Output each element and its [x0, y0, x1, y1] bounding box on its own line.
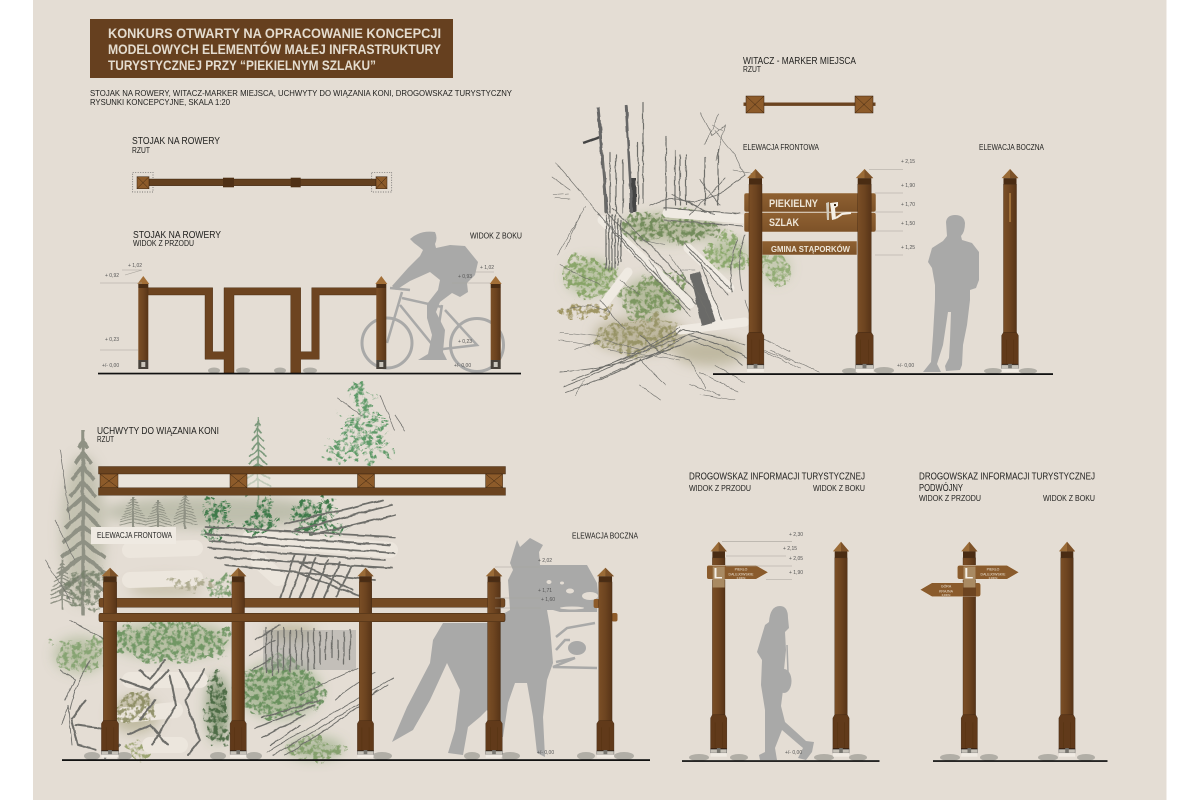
heading: rack plan: RZUT [132, 146, 150, 155]
ground line [98, 373, 521, 374]
arrow sign: left: KRAJNA [939, 590, 954, 594]
arrow sign: right: PIEKŁO [987, 568, 1000, 572]
heading: rack plan [132, 136, 220, 155]
panel: single signpost [682, 472, 880, 762]
sign text [769, 198, 851, 254]
icon: ermine logo [826, 202, 851, 220]
silhouette: walking woman with bag [757, 606, 814, 760]
rocks [689, 754, 867, 761]
dimensions: + 1,02 [480, 265, 494, 271]
rocks [208, 368, 317, 374]
front rail overlay [99, 613, 505, 622]
icon: trail logo panel [713, 566, 725, 588]
title banner: MODELOWYCH ELEMENTÓW MAŁEJ INFRASTRUKTURY [108, 42, 441, 57]
subtitle text: STOJAK NA ROWERY, WITACZ-MARKER MIEJSCA, UCHWYTY DO WIĄZANIA KONI, DROGOWSKAZ TURYSTYCZNY [90, 88, 512, 98]
drawing: witacz plan [744, 96, 876, 113]
posts [747, 169, 1018, 372]
arrow sign: right [957, 565, 1019, 580]
heading: rack front view [133, 230, 221, 248]
subtitle text: RYSUNKI KONCEPCYJNE, SKALA 1:20 [90, 97, 230, 107]
silhouette: cyclist [362, 232, 504, 372]
heading: hitching plan: UCHWYTY DO WIĄZANIA KONI [97, 426, 219, 437]
rocks [842, 367, 1037, 374]
heading: hitching front elevation: ELEWACJA FRONTOWA [97, 531, 173, 540]
drawing: rack frame [148, 288, 377, 373]
subtitle text [90, 88, 512, 107]
dimensions: +/- 0,00 [102, 363, 119, 369]
arrow sign: left: GÓRA [941, 584, 952, 588]
arrow sign: right: DALEJOWSKIE [981, 572, 1006, 576]
dimensions: +/- 0,00 [785, 750, 802, 756]
heading: double signpost [919, 472, 1095, 503]
heading: signpost: DROGOWSKAZ INFORMACJI TURYSTYCZNEJ [689, 472, 865, 482]
heading: double signpost: DROGOWSKAZ INFORMACJI TURYSTYCZNEJ [919, 472, 1095, 482]
sign boards [744, 193, 876, 255]
dimensions: + 2,02 [538, 558, 552, 564]
dimensions: + 2,30 [789, 532, 803, 538]
ground line [933, 760, 1108, 762]
ground line [62, 759, 650, 761]
heading: hitching side elevation: ELEWACJA BOCZNA [572, 532, 639, 540]
dimensions: + 0,23 [105, 337, 119, 343]
rails [99, 598, 618, 622]
dimensions: + 1,50 [901, 221, 915, 227]
heading: witacz side elevation: ELEWACJA BOCZNA [979, 143, 1045, 152]
arrow sign: right: 0,00KM [989, 577, 997, 580]
heading: rack front view: STOJAK NA ROWERY [133, 230, 221, 241]
dimensions: + 0,92 [105, 273, 119, 279]
dimensions: + 1,90 [901, 183, 915, 189]
drawing: hitching plan [98, 466, 506, 495]
dimensions [100, 263, 494, 369]
posts [961, 542, 1075, 757]
arrow sign: left [920, 583, 981, 597]
posts [101, 568, 614, 758]
dimensions: + 2,15 [901, 159, 915, 165]
dimensions: + 2,15 [783, 546, 797, 552]
arrow sign: left: 0,00KM [942, 594, 950, 597]
heading: witacz front elevation: ELEWACJA FRONTOWA [743, 143, 820, 152]
dimensions: + 1,60 [541, 597, 555, 603]
heading: hitching plan [97, 426, 219, 444]
heading: double signpost: WIDOK Z PRZODU [919, 494, 981, 503]
illustration: forest sketch bottom left [45, 385, 500, 760]
heading: signpost: WIDOK Z PRZODU [689, 484, 751, 493]
arrow sign: PIEKŁO [735, 568, 748, 572]
title banner: TURYSTYCZNEJ PRZY “PIEKIELNYM SZLAKU” [108, 58, 376, 73]
arrow sign: 0,00KM [737, 577, 745, 580]
rocks [940, 754, 1095, 761]
dimensions: +/- 0,00 [897, 363, 914, 369]
dimensions: + 2,05 [789, 556, 803, 562]
dimensions: +/- 0,00 [454, 363, 471, 369]
silhouette: standing man with backpack [923, 215, 979, 372]
title banner [90, 19, 453, 78]
sign text: SZLAK [769, 217, 799, 229]
panel: witacz marker [713, 56, 1053, 375]
posts [711, 542, 849, 757]
heading: double signpost: PODWÓJNY [919, 481, 963, 494]
icon: trail logo panel [964, 566, 976, 588]
dimensions: +/- 0,00 [537, 750, 554, 756]
panel: bicycle rack elevations [98, 230, 522, 374]
heading: witacz [743, 56, 856, 74]
heading: signpost [689, 472, 865, 493]
dimensions: + 0,23 [458, 339, 472, 345]
ground line [682, 760, 880, 762]
ground line [713, 373, 1053, 375]
dimensions: + 1,90 [789, 570, 803, 576]
drawing: rack plan [133, 172, 392, 192]
heading: witacz: WITACZ - MARKER MIEJSCA [743, 56, 856, 67]
dimensions [722, 532, 803, 756]
silhouette: horse [392, 538, 598, 757]
heading: rack plan: STOJAK NA ROWERY [132, 136, 220, 147]
illustration: forest sketch top right [552, 103, 820, 400]
rack posts [137, 276, 502, 369]
dimensions: + 1,70 [901, 202, 915, 208]
arrow sign: DALEJOWSKIE [729, 572, 754, 576]
heading: rack side view: WIDOK Z BOKU [470, 232, 522, 240]
panel: double signpost [919, 472, 1108, 762]
dimensions: + 1,02 [128, 263, 142, 269]
heading: rack front view: WIDOK Z PRZODU [133, 239, 194, 248]
title banner: KONKURS OTWARTY NA OPRACOWANIE KONCEPCJI [108, 26, 441, 41]
sign text: GMINA STĄPORKÓW [771, 243, 851, 254]
heading: witacz: RZUT [743, 65, 761, 74]
dimensions: + 0,93 [458, 274, 472, 280]
panel: bicycle rack plan [132, 136, 392, 192]
side detail strip [1009, 193, 1011, 222]
heading: signpost: WIDOK Z BOKU [813, 484, 865, 493]
heading: hitching plan: RZUT [97, 435, 114, 444]
rocks [84, 752, 634, 760]
panel: horse hitching rail [62, 426, 650, 761]
post front strip over left sign [963, 583, 976, 597]
dimensions [869, 159, 915, 369]
dimensions: + 1,25 [901, 245, 915, 251]
dimensions: + 1,71 [538, 588, 552, 594]
heading: double signpost: WIDOK Z BOKU [1043, 494, 1095, 503]
sign text: PIEKIELNY [769, 198, 819, 210]
arrow sign [707, 565, 768, 580]
dimensions [495, 558, 555, 756]
